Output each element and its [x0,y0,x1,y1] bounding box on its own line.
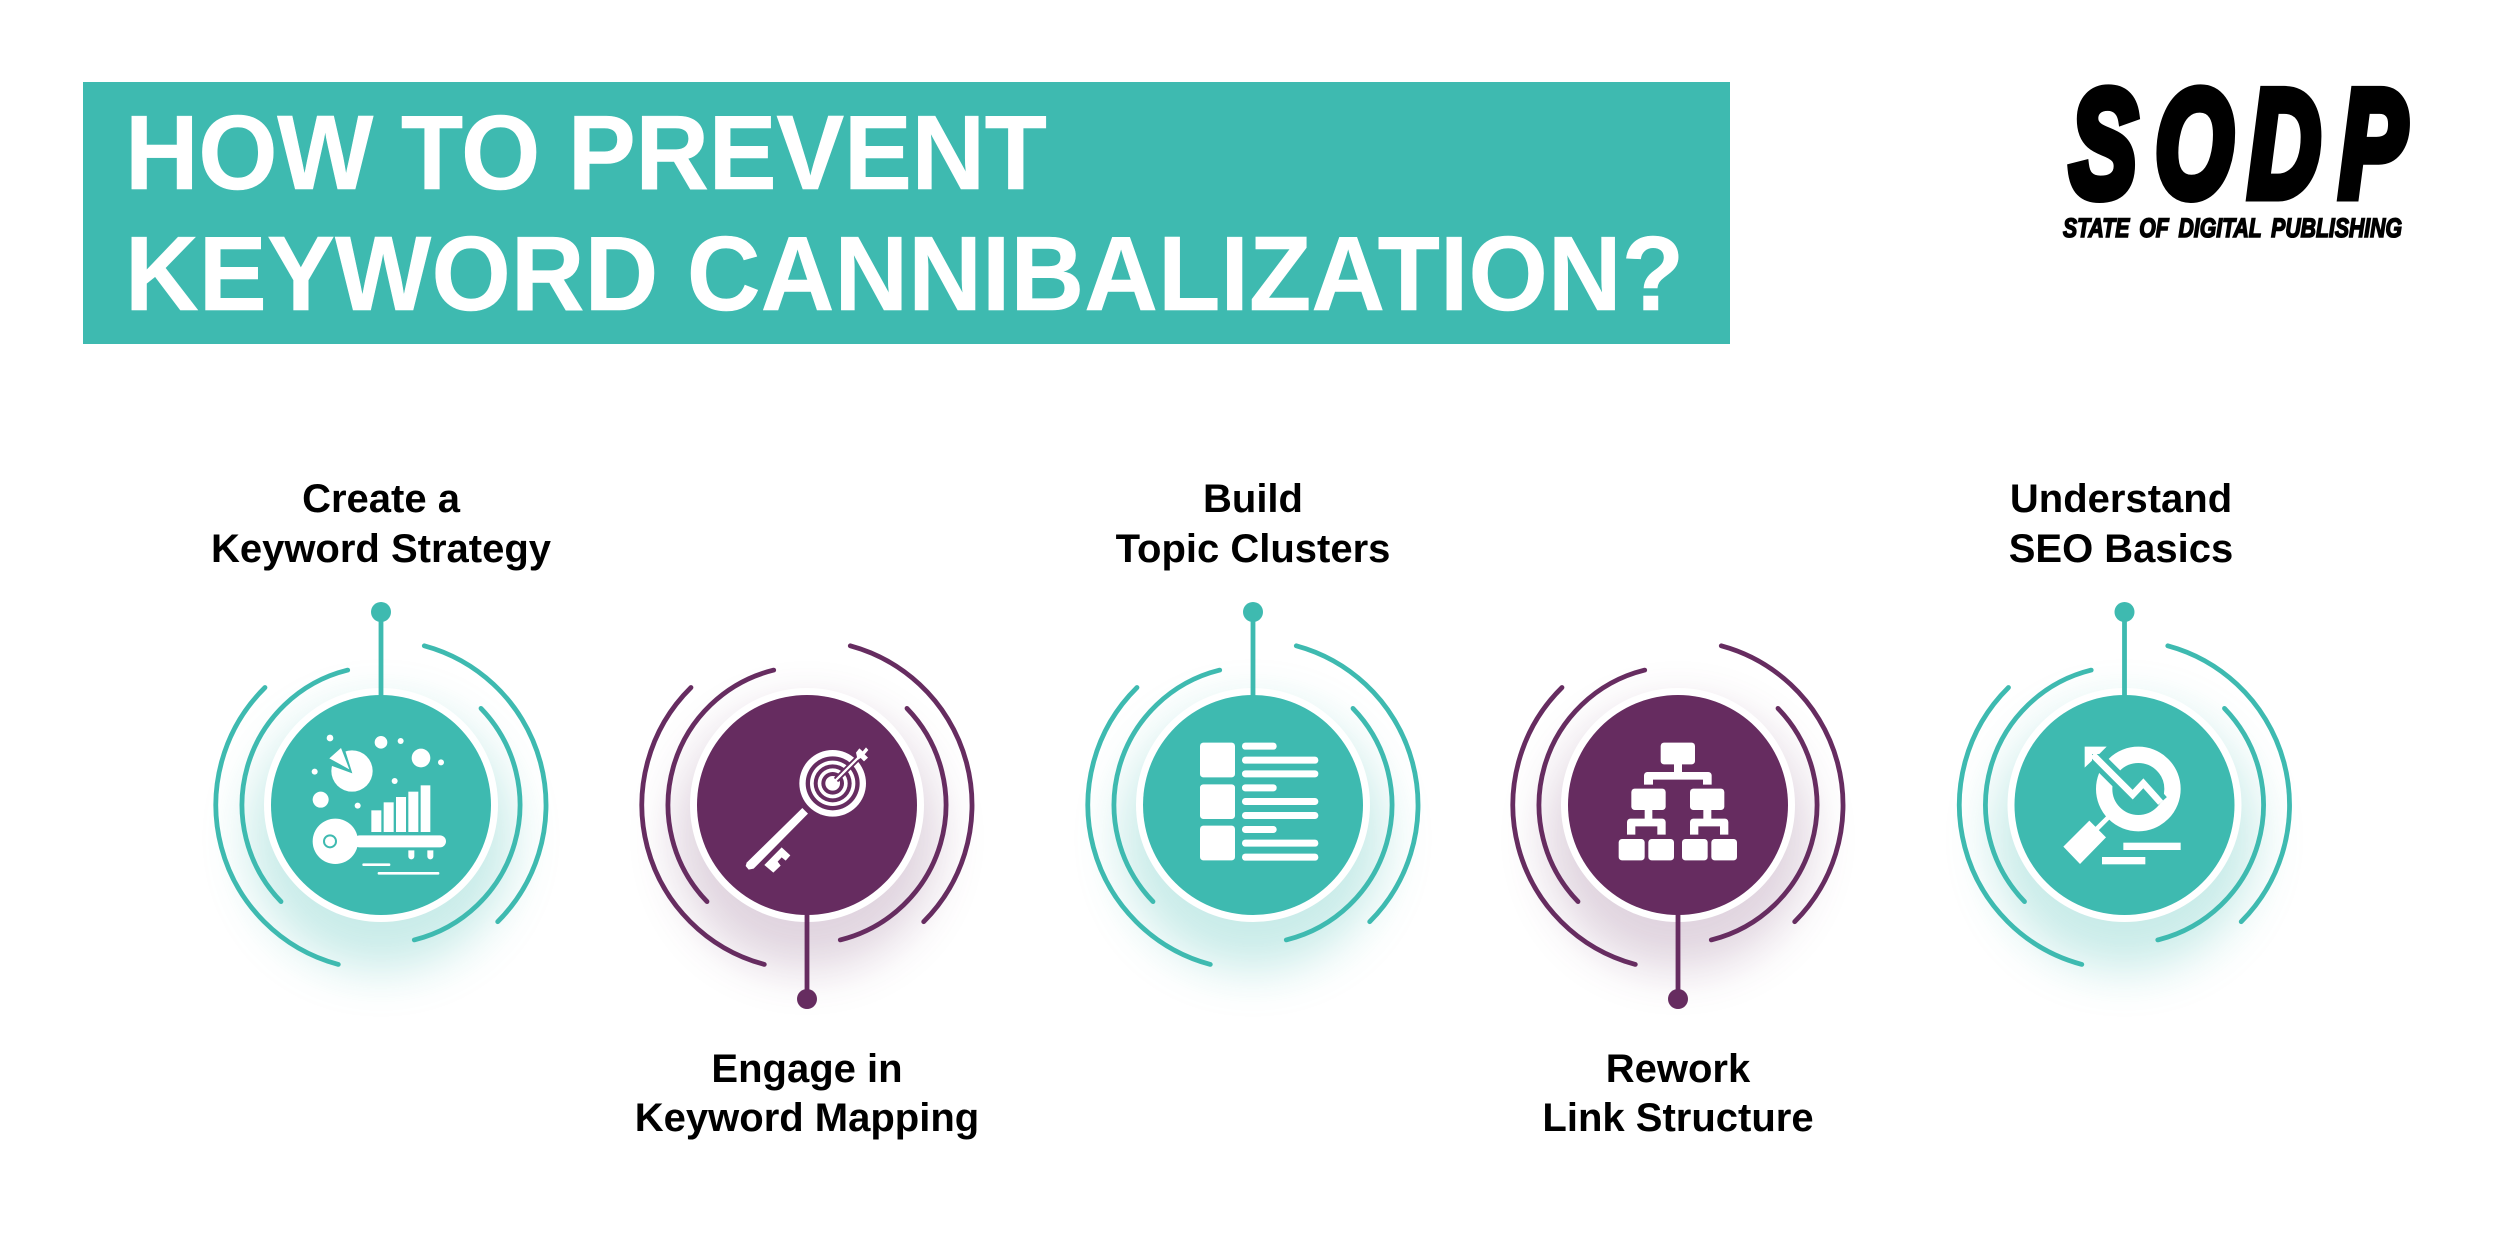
logo: SODP: SODP [2070,59,2407,229]
icon: hierarchy [1619,743,1737,860]
title text: KEYWORD CANNIBALIZATION? [125,214,1684,332]
title text: HOW TO PREVENT [125,93,1047,211]
step 3: topic clusters [1088,602,1418,970]
step 2 label: Keyword Mapping [635,1096,979,1140]
step 5: SEO basics [1959,602,2290,970]
step 1: keyword strategy [216,602,546,970]
step 4: link structure [1513,646,1843,1009]
step 4 label: Link Structure [1542,1096,1814,1140]
title text [125,93,1684,332]
step 5 label: SEO Basics [2009,527,2233,571]
step 1 label: Create a [302,477,461,521]
logo tagline: STATE OF DIGITAL PUBLISHING [2063,213,2402,243]
step 3 label: Topic Clusters [1116,527,1390,571]
step 5 label: Understand [2010,477,2232,521]
icon: magnifier with trend arrow [2063,747,2181,864]
step 1 label: Keyword Strategy [211,527,552,571]
step 4 label: Rework [1606,1047,1751,1091]
step 2: keyword mapping [642,646,972,1009]
icon: key with charts [312,735,446,875]
step 3 label: Build [1203,477,1303,521]
icon: content list [1200,743,1318,861]
title banner [83,82,1730,344]
icon: key with target [746,747,868,873]
step 2 label: Engage in [711,1047,903,1091]
